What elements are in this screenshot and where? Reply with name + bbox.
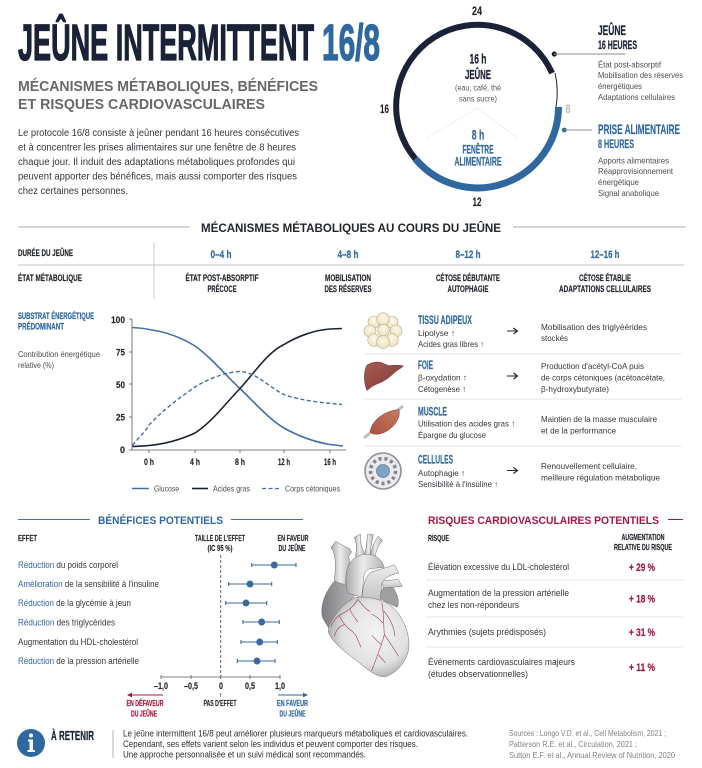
row: liver: β-oxydation ↑ <box>418 372 467 382</box>
line chart: 25 <box>116 412 126 424</box>
24h clock diagram: (eau, café, thé <box>455 84 501 92</box>
phase table: CÉTOSE ÉTABLIE <box>579 273 631 283</box>
phase table <box>18 243 684 299</box>
subtitle: ET RISQUES CARDIOVASCULAIRES <box>18 97 265 113</box>
risk table: Événements cardiovasculaires majeurs <box>428 657 575 667</box>
forest plot: PAS D'EFFET <box>204 698 237 708</box>
24h clock diagram: FENÊTRE <box>462 144 494 156</box>
risk table: + 31 % <box>629 627 655 639</box>
chart legend <box>132 484 340 494</box>
24h clock diagram: sans sucre) <box>459 94 497 104</box>
heading: benefits: BÉNÉFICES POTENTIELS <box>98 514 223 527</box>
phase table: DURÉE DU JEÛNE <box>18 247 73 258</box>
line chart: 100 <box>111 315 125 326</box>
row: adipose tissue: TISSU ADIPEUX <box>418 315 472 327</box>
icon: information <box>17 729 45 757</box>
phase table: ÉTAT MÉTABOLIQUE <box>18 273 82 283</box>
icon: liver <box>364 362 404 390</box>
row: cells: Sensibilité à l'insuline ↑ <box>418 479 498 489</box>
24h clock diagram: 12 <box>472 197 482 209</box>
24h clock diagram: 8 h <box>472 126 484 142</box>
24h clock diagram <box>380 6 571 209</box>
arrow: against fasting: DU JEÛNE <box>131 708 157 718</box>
effect labels <box>18 559 159 666</box>
phase table: AUTOPHAGIE <box>448 284 488 294</box>
fasting arc <box>396 25 552 159</box>
legend: fasting: État post-absorptif <box>598 60 662 70</box>
row: muscle: Utilisation des acides gras ↑ <box>418 418 515 428</box>
risk table: Arythmies (sujets prédisposés) <box>428 627 546 637</box>
chart caption: SUBSTRAT ÉNERGÉTIQUE <box>18 311 94 321</box>
risk table: Augmentation de la pression artérielle <box>428 588 569 598</box>
risk table: AUGMENTATION <box>622 533 665 542</box>
risk table: + 18 % <box>629 594 655 606</box>
chart legend: Glucose <box>154 484 179 494</box>
effect labels: Amélioration de la sensibilité à l'insuline <box>18 578 159 589</box>
illustration: heart <box>322 534 409 677</box>
chart legend: Acides gras <box>213 484 250 494</box>
row: adipose tissue: stockés <box>541 333 568 343</box>
row: liver: FOIE <box>418 360 433 372</box>
line chart: 50 <box>116 380 125 391</box>
chart caption: PRÉDOMINANT <box>18 322 64 332</box>
legend: fasting: énergétiques <box>598 81 642 91</box>
forest plot <box>18 533 309 718</box>
forest plot: –0,5 <box>184 681 198 691</box>
subtitle <box>18 78 318 113</box>
sources: Sutton E.F. et al., Annual Review of Nutrition, 2020 <box>509 751 675 760</box>
risk table: RELATIVE DU RISQUE <box>614 543 672 552</box>
line chart: 12 h <box>278 457 290 468</box>
intro paragraph: chaque jour. Il induit des adaptations métaboliques profondes qui <box>18 157 295 168</box>
phase table: 8–12 h <box>456 249 481 261</box>
row: cells <box>418 454 660 489</box>
risk table: (études observationnelles) <box>428 669 528 679</box>
arrow: against fasting <box>126 693 164 718</box>
forest plot: 0,5 <box>245 681 255 691</box>
legend: eating window: énergétique <box>598 177 639 187</box>
icon: adipose tissue <box>364 313 402 348</box>
row: adipose tissue: Mobilisation des triglyéérides <box>541 322 647 332</box>
row: muscle <box>418 406 657 440</box>
phase table: 0–4 h <box>210 249 232 261</box>
heading: risks: RISQUES CARDIOVASCULAIRES POTENTIELS <box>428 515 659 527</box>
intro paragraph <box>18 128 299 197</box>
sources: Sources : Longo V.D. et al., Cell Metabolism, 2021 ; <box>509 729 666 738</box>
effect axis <box>161 675 280 697</box>
legend: fasting: Adaptations cellulaires <box>598 92 675 102</box>
legend: fasting <box>552 21 683 102</box>
line chart: 4 h <box>190 457 200 468</box>
legend: eating window <box>562 121 680 198</box>
row: muscle: et de la performance <box>541 426 616 436</box>
icon: muscle <box>364 406 403 438</box>
chart caption: Contribution énergétique <box>18 349 100 359</box>
legend: eating window: Apports alimentaires <box>598 156 669 166</box>
title: JEÛNE INTERMITTENT <box>18 13 314 71</box>
risk table: + 29 % <box>629 562 655 574</box>
forest plot: –1,0 <box>154 681 168 691</box>
chart caption <box>18 311 100 370</box>
row: muscle: Maintien de la masse musculaire <box>541 414 657 424</box>
column headers: (IC 95 %) <box>208 543 233 553</box>
row: muscle: MUSCLE <box>418 406 447 418</box>
line chart: 0 h <box>144 457 154 468</box>
risk table: chez les non-répondeurs <box>428 600 519 610</box>
legend: eating window: 8 HEURES <box>598 137 634 151</box>
line chart: 75 <box>116 348 126 358</box>
chart caption: relative (%) <box>18 360 54 370</box>
legend: eating window: Signal anabolique <box>598 188 659 198</box>
row: cells: meilleure régulation métabolique <box>541 472 660 482</box>
column headers <box>18 533 309 553</box>
key takeaway: Cependant, ses effets varient selon les individus et peuvent comporter des risques. <box>123 739 418 749</box>
fatty acids curve <box>132 328 342 446</box>
row: liver <box>418 360 665 394</box>
24h clock diagram: 8 <box>566 104 571 116</box>
effect markers <box>226 562 296 664</box>
risk table: Élévation excessive du LDL-cholestérol <box>428 562 569 572</box>
row: cells: Autophagie ↑ <box>418 468 465 478</box>
effect labels: Augmentation du HDL-cholestérol <box>18 636 138 647</box>
arrow: against fasting: EN DÉFAVEUR <box>126 698 164 708</box>
24h clock diagram: 24 <box>472 6 482 18</box>
row: adipose tissue <box>418 315 647 349</box>
chart legend: Corps cétoniques <box>285 484 340 494</box>
forest plot: 0 <box>219 681 223 691</box>
24h clock diagram: ALIMENTAIRE <box>454 156 502 168</box>
legend: fasting: JEÛNE <box>598 21 626 38</box>
section heading: mechanisms: MÉCANISMES MÉTABOLIQUES AU COURS DU JEÛNE <box>201 220 501 235</box>
24h clock diagram: 16 h <box>470 50 486 66</box>
phase table: PRÉCOCE <box>208 284 236 294</box>
phase table: 4–8 h <box>338 249 359 261</box>
legend: fasting: 16 HEURES <box>598 38 637 52</box>
key takeaway: Une approche personnalisée et un suivi médical sont recommandés. <box>123 750 366 760</box>
title <box>18 13 380 71</box>
row: cells: CELLULES <box>418 454 453 466</box>
risk table: + 11 % <box>629 662 655 674</box>
row: muscle: Épargne du glucose <box>418 430 486 440</box>
row: liver: Production d'acétyl-CoA puis <box>541 361 644 371</box>
line chart: 16 h <box>324 457 336 468</box>
panel: organ table <box>363 313 682 489</box>
phase table: ÉTAT POST-ABSORPTIF <box>186 273 259 283</box>
title: 16/8 <box>322 14 380 71</box>
row: liver: β-hydroxybutyrate) <box>541 384 609 394</box>
risk table: RISQUE <box>428 534 449 543</box>
column headers: EFFET <box>18 533 38 543</box>
24h clock diagram: JEÛNE <box>465 67 491 82</box>
row: liver: Cétogenèse ↑ <box>418 384 466 394</box>
key takeaway: Le jeûne intermittent 16/8 peut améliorer plusieurs marqueurs métaboliques et cardiovasculaires. <box>123 728 468 738</box>
icon: cell <box>365 453 401 489</box>
row: adipose tissue: Acides gras libres ↑ <box>418 339 484 349</box>
sources: Patterson R.E. et al., Circulation, 2021 ; <box>509 740 637 749</box>
eating arc <box>416 107 558 188</box>
arrow: favours fasting: EN FAVEUR <box>277 698 309 708</box>
effect labels: Réduction du poids corporel <box>18 559 118 570</box>
risk table <box>426 533 684 679</box>
arrow: favours fasting <box>277 693 309 718</box>
effect labels: Réduction de la pression artérielle <box>18 655 139 666</box>
key takeaway <box>51 728 468 760</box>
forest plot: 1,0 <box>275 681 285 691</box>
subtitle: MÉCANISMES MÉTABOLIQUES, BÉNÉFICES <box>18 78 318 95</box>
sources <box>509 729 675 760</box>
line chart: 0 <box>120 445 125 456</box>
effect labels: Réduction des triglycérides <box>18 616 115 628</box>
intro paragraph: et à concentrer les prises alimentaires sur une fenêtre de 8 heures <box>18 142 296 154</box>
phase table: MOBILISATION <box>325 273 371 283</box>
effect labels: Réduction de la glycémie à jeun <box>18 597 131 608</box>
phase table: CÉTOSE DÉBUTANTE <box>436 273 500 283</box>
column headers: EN FAVEUR <box>278 533 309 543</box>
phase table: DES RÉSERVES <box>324 284 372 294</box>
line chart: 8 h <box>235 457 245 468</box>
legend: eating window: Réapprovisionnement <box>598 166 674 176</box>
row: adipose tissue: Lipolyse ↑ <box>418 328 455 338</box>
glucose curve <box>132 328 343 446</box>
phase table: 12–16 h <box>590 249 620 261</box>
intro paragraph: peuvent apporter des bénéfices, mais aussi comporter des risques <box>18 172 297 182</box>
ketone bodies curve <box>132 372 342 446</box>
key takeaway: À RETENIR <box>51 728 94 743</box>
column headers: DU JEÛNE <box>278 542 306 553</box>
intro paragraph: chez certaines personnes. <box>18 186 128 197</box>
line chart <box>111 315 346 494</box>
intro paragraph: Le protocole 16/8 consiste à jeûner pendant 16 heures consécutives <box>18 128 299 139</box>
row: cells: Renouvellement cellulaire, <box>541 461 637 471</box>
24h clock diagram: 16 <box>380 104 389 116</box>
arrow: favours fasting: DU JEÛNE <box>280 708 306 718</box>
phase table: ADAPTATIONS CELLULAIRES <box>559 284 651 294</box>
row: liver: de corps cétoniques (acétoacétate, <box>541 372 665 382</box>
legend: fasting: Mobilisation des réserves <box>598 70 683 80</box>
column headers: TAILLE DE L'EFFET <box>195 533 245 543</box>
